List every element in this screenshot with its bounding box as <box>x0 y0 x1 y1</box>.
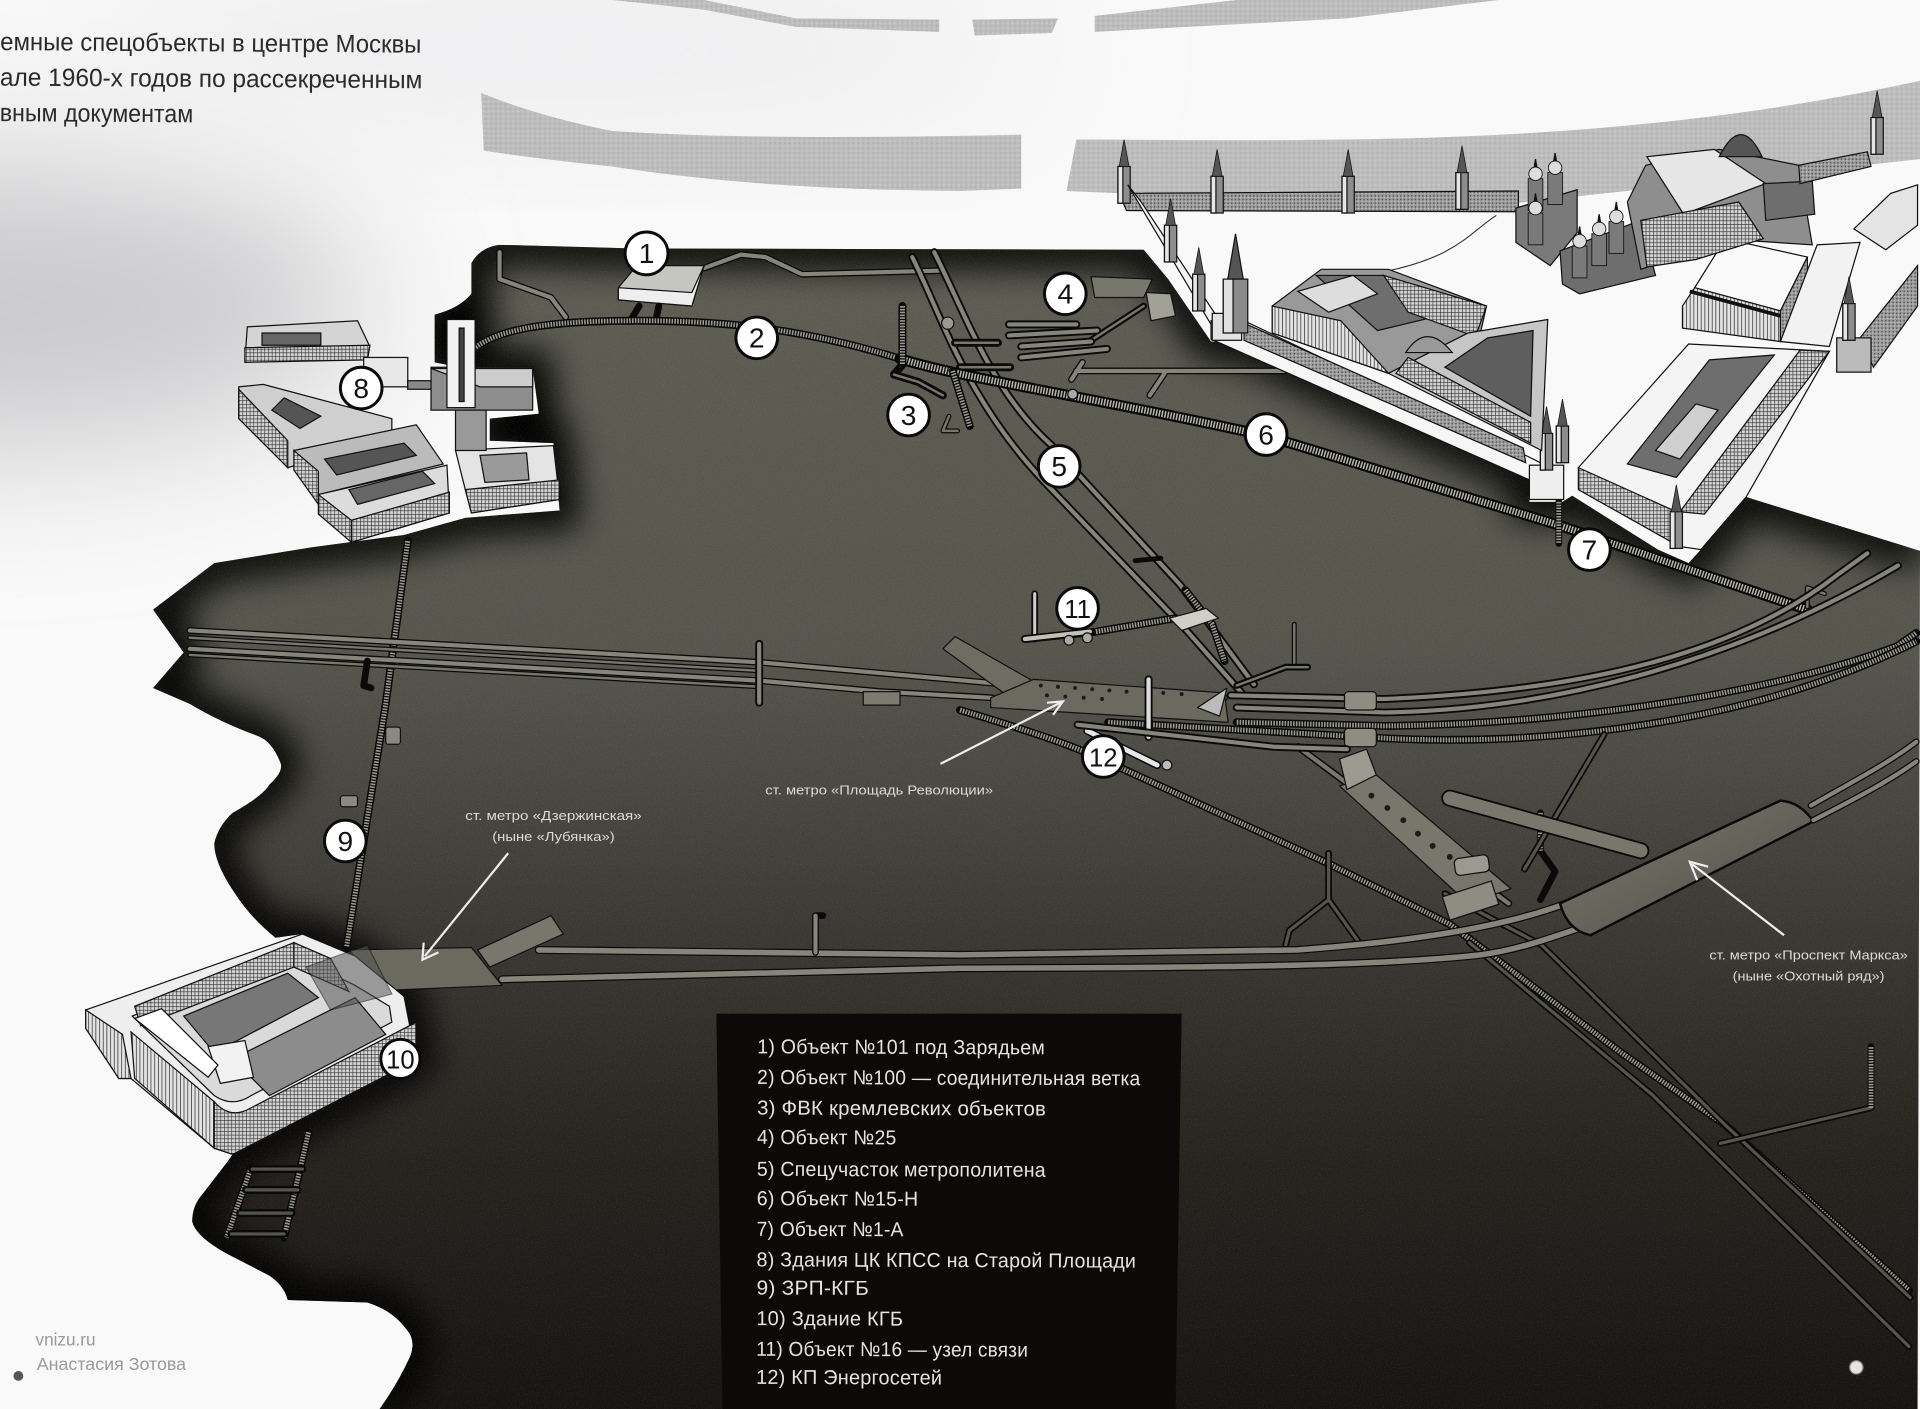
tunnel 6: object 15-N <box>900 359 1824 610</box>
page holes <box>13 1361 1863 1381</box>
dark underground area <box>122 239 1920 1409</box>
credits <box>36 1329 187 1374</box>
marker 11 <box>1057 588 1098 629</box>
arrow to Dzerzhinskaya <box>422 853 508 960</box>
object 1 bunker <box>618 266 704 318</box>
credits: vnizu.ru <box>36 1329 95 1349</box>
marker 1: 1 <box>639 238 654 269</box>
marker 4 <box>1044 273 1086 315</box>
tunnel 9: ZRP-KGB <box>340 541 408 947</box>
marker 2 <box>736 317 778 359</box>
station Ploshchad Revolyutsii <box>863 637 1228 737</box>
marker 12 <box>1082 736 1124 777</box>
river bands <box>481 0 1920 208</box>
triangular building <box>1389 320 1548 450</box>
caption: Dzerzhinskaya <box>465 808 642 844</box>
diagonal station with perforated wall <box>1298 747 1511 920</box>
buildings 8: Central Committee on Staraya Square <box>239 320 560 542</box>
thin path line <box>1384 215 1496 272</box>
Prospekt Marksa station cylinder <box>1560 742 1916 935</box>
Kremlin Palace of Congresses <box>1682 239 1807 342</box>
legend text: 11) Объект №16 — узел связи <box>756 1339 1028 1362</box>
intro text: вным документам <box>0 99 193 128</box>
marker 5 <box>1038 446 1080 487</box>
tunnel: upper-left branch and object 1 link <box>500 252 943 317</box>
tunnel 2: connecting branch <box>468 321 900 359</box>
west wall <box>1128 185 1222 324</box>
legend panel <box>716 1014 1182 1409</box>
legend text: 5) Спецучасток метрополитена <box>757 1159 1046 1182</box>
Arsenal triangle <box>1578 344 1829 550</box>
object 4: bunker and pipes <box>1009 277 1284 399</box>
marker 7: 7 <box>1582 534 1597 565</box>
metro lines west–east <box>190 630 1224 703</box>
legend text: 6) Объект №15-Н <box>757 1188 918 1211</box>
caption: Dzerzhinskaya: ст. метро «Дзержинская» <box>465 808 642 823</box>
marker 4: 4 <box>1057 279 1073 310</box>
eastern wall and road <box>1780 91 1918 372</box>
legend text: 1) Объект №101 под Зарядьем <box>757 1036 1045 1059</box>
caption: Dzerzhinskaya: (ныне «Лубянка») <box>492 829 615 844</box>
object 12: power grid command post <box>1078 725 1347 770</box>
tunnel 5: metro special section <box>912 252 1254 693</box>
inner palace cluster <box>1627 135 1871 269</box>
marker 1 <box>625 232 668 275</box>
diagonal lower tunnels <box>960 624 1910 1347</box>
arrow to Prospekt Marksa <box>1690 862 1784 935</box>
marker 8 <box>340 367 382 409</box>
marker 5: 5 <box>1051 451 1067 482</box>
marker 3 <box>888 394 929 436</box>
legend text: 8) Здания ЦК КПСС на Старой Площади <box>757 1249 1136 1273</box>
caption: Ploshchad Revolyutsii: ст. метро «Площадь Революции» <box>765 782 993 797</box>
Spasskaya tower and south wall <box>1211 234 1545 485</box>
intro text: емные спецобъекты в центре Москвы <box>0 28 421 59</box>
north wall with towers <box>1118 140 1518 213</box>
caption: Prospekt Marksa: ст. метро «Проспект Маркса» <box>1709 948 1908 963</box>
legend text: 2) Объект №100 — соединительная ветка <box>757 1067 1141 1090</box>
marker 10: 10 <box>386 1047 415 1075</box>
object 11: communications node <box>1025 594 1218 645</box>
marker 7 <box>1569 529 1610 570</box>
lower ladder tunnels <box>227 1132 309 1238</box>
Kremlin <box>1118 91 1918 550</box>
Senate block <box>1272 269 1487 373</box>
marker 12: 12 <box>1089 744 1118 772</box>
marker 3: 3 <box>901 400 916 431</box>
caption: Prospekt Marksa <box>1709 948 1908 984</box>
arrow to Ploshchad Revolyutsii <box>940 701 1063 764</box>
object 3: cable tubes <box>894 306 970 431</box>
marker 6: 6 <box>1258 419 1274 450</box>
legend text: 12) КП Энергосетей <box>756 1367 942 1390</box>
intro text <box>0 28 423 130</box>
legend text <box>756 1036 1141 1390</box>
connection ramp to Marx station <box>1450 798 1641 851</box>
Lubyanka station tunnel <box>349 903 1591 990</box>
marker 2: 2 <box>749 323 765 354</box>
marker 11: 11 <box>1064 596 1091 624</box>
credits: Анастасия Зотова <box>37 1354 187 1374</box>
legend text: 4) Объект №25 <box>757 1127 897 1149</box>
legend text: 7) Объект №1-А <box>757 1219 904 1241</box>
marker 8: 8 <box>353 373 369 404</box>
legend text: 9) ЗРП-КГБ <box>756 1278 869 1300</box>
marker 9 <box>324 820 366 862</box>
cathedrals <box>1516 153 1656 294</box>
marker 6 <box>1245 414 1287 455</box>
building 10: KGB <box>86 934 416 1154</box>
marker 9: 9 <box>337 826 353 857</box>
east metro bundle <box>1108 553 1916 747</box>
corner tower <box>1529 399 1569 499</box>
number markers <box>324 232 1610 1078</box>
legend text: 10) Здание КГБ <box>756 1308 903 1331</box>
intro text: але 1960-х годов по рассекреченным <box>0 64 422 94</box>
caption: Prospekt Marksa: (ныне «Охотный ряд») <box>1733 969 1884 984</box>
legend text: 3) ФВК кремлевских объектов <box>757 1098 1046 1121</box>
marker 10 <box>381 1039 420 1078</box>
